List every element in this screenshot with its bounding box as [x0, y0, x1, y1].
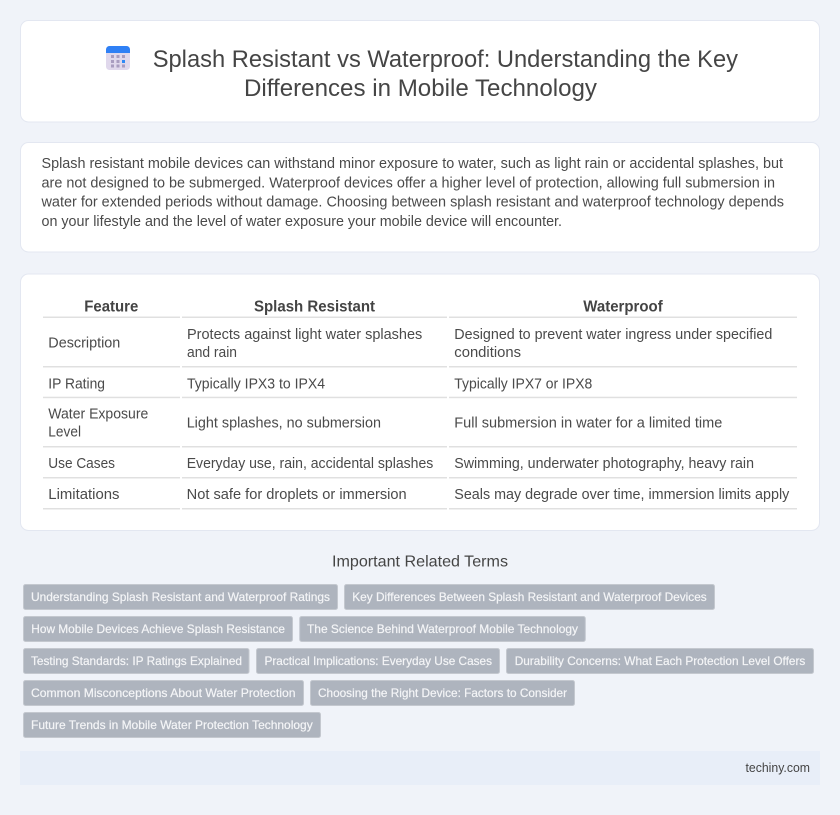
row: description: and rain [187, 345, 237, 361]
text block: intro: are not designed to be submerged. Waterproof devices offer a higher level of protection, allowing full submersion in [42, 175, 775, 191]
footer [20, 751, 820, 785]
row: limitations: Limitations [48, 487, 119, 503]
icon: calendar [106, 46, 130, 70]
row: limitations: Not safe for droplets or immersion [187, 487, 407, 503]
row: use cases: Swimming, underwater photography, heavy rain [454, 456, 754, 472]
title: Differences in Mobile Technology [244, 75, 597, 102]
row: description: Description [48, 336, 120, 352]
panel: related term tags: Testing Standards: IP Ratings Explained [31, 654, 242, 668]
row: water exposure level [48, 406, 722, 441]
panel: related term tags: How Mobile Devices Achieve Splash Resistance [31, 622, 285, 636]
panel: comparison table [20, 274, 820, 530]
row: description: conditions [454, 345, 521, 361]
table header: Waterproof [583, 299, 663, 316]
panel: related term tags: Common Misconceptions About Water Protection [31, 686, 296, 700]
table header: Feature [84, 299, 138, 316]
panel: related term tags: Durability Concerns: What Each Protection Level Offers [515, 654, 805, 668]
row: use cases [48, 456, 754, 472]
text block: intro [40, 156, 784, 230]
panel: related term tags: Key Differences Between Splash Resistant and Waterproof Devices [352, 590, 707, 604]
panel: related term tags: Understanding Splash Resistant and Waterproof Ratings [31, 590, 330, 604]
row: description: Designed to prevent water ingress under specified [454, 327, 772, 343]
row: limitations [48, 487, 790, 503]
panel: related term tags [24, 584, 814, 738]
row: water exposure level: Level [48, 425, 81, 441]
row: water exposure level: Light splashes, no submersion [187, 416, 381, 432]
row: description [48, 327, 772, 361]
row: description: Protects against light water splashes [187, 327, 422, 343]
row: water exposure level: Full submersion in water for a limited time [454, 416, 722, 432]
panel: related term tags: Practical Implications: Everyday Use Cases [264, 654, 492, 668]
text block: intro: Splash resistant mobile devices can withstand minor exposure to water, such as light rain or accidental splashes, but [42, 156, 783, 172]
title: Splash Resistant vs Waterproof: Understanding the Key [153, 46, 738, 73]
panel: related term tags: Future Trends in Mobile Water Protection Technology [31, 718, 313, 732]
panel: related term tags: Choosing the Right Device: Factors to Consider [318, 686, 567, 700]
panel: intro paragraph [20, 142, 820, 252]
row: IP rating [48, 376, 592, 392]
row: IP rating: Typically IPX7 or IPX8 [454, 376, 592, 392]
row: IP rating: IP Rating [48, 376, 105, 392]
text block: intro: on your lifestyle and the level of water exposure your mobile device will encounter. [42, 214, 562, 230]
table header: Splash Resistant [254, 299, 376, 316]
row: use cases: Everyday use, rain, accidental splashes [187, 456, 433, 472]
heading: important related terms: Important Related Terms [332, 554, 508, 571]
text block: intro: water for extended periods without damage. Choosing between splash resistant and waterproof technology depends [40, 195, 784, 211]
title [153, 46, 738, 102]
panel: header [20, 20, 820, 122]
row: water exposure level: Water Exposure [48, 406, 148, 422]
row: use cases: Use Cases [48, 456, 115, 472]
table header [84, 299, 663, 316]
panel: related term tags: The Science Behind Waterproof Mobile Technology [307, 622, 578, 636]
row: limitations: Seals may degrade over time, immersion limits apply [454, 487, 790, 503]
footer: techiny.com [746, 760, 810, 775]
row: IP rating: Typically IPX3 to IPX4 [187, 376, 325, 392]
